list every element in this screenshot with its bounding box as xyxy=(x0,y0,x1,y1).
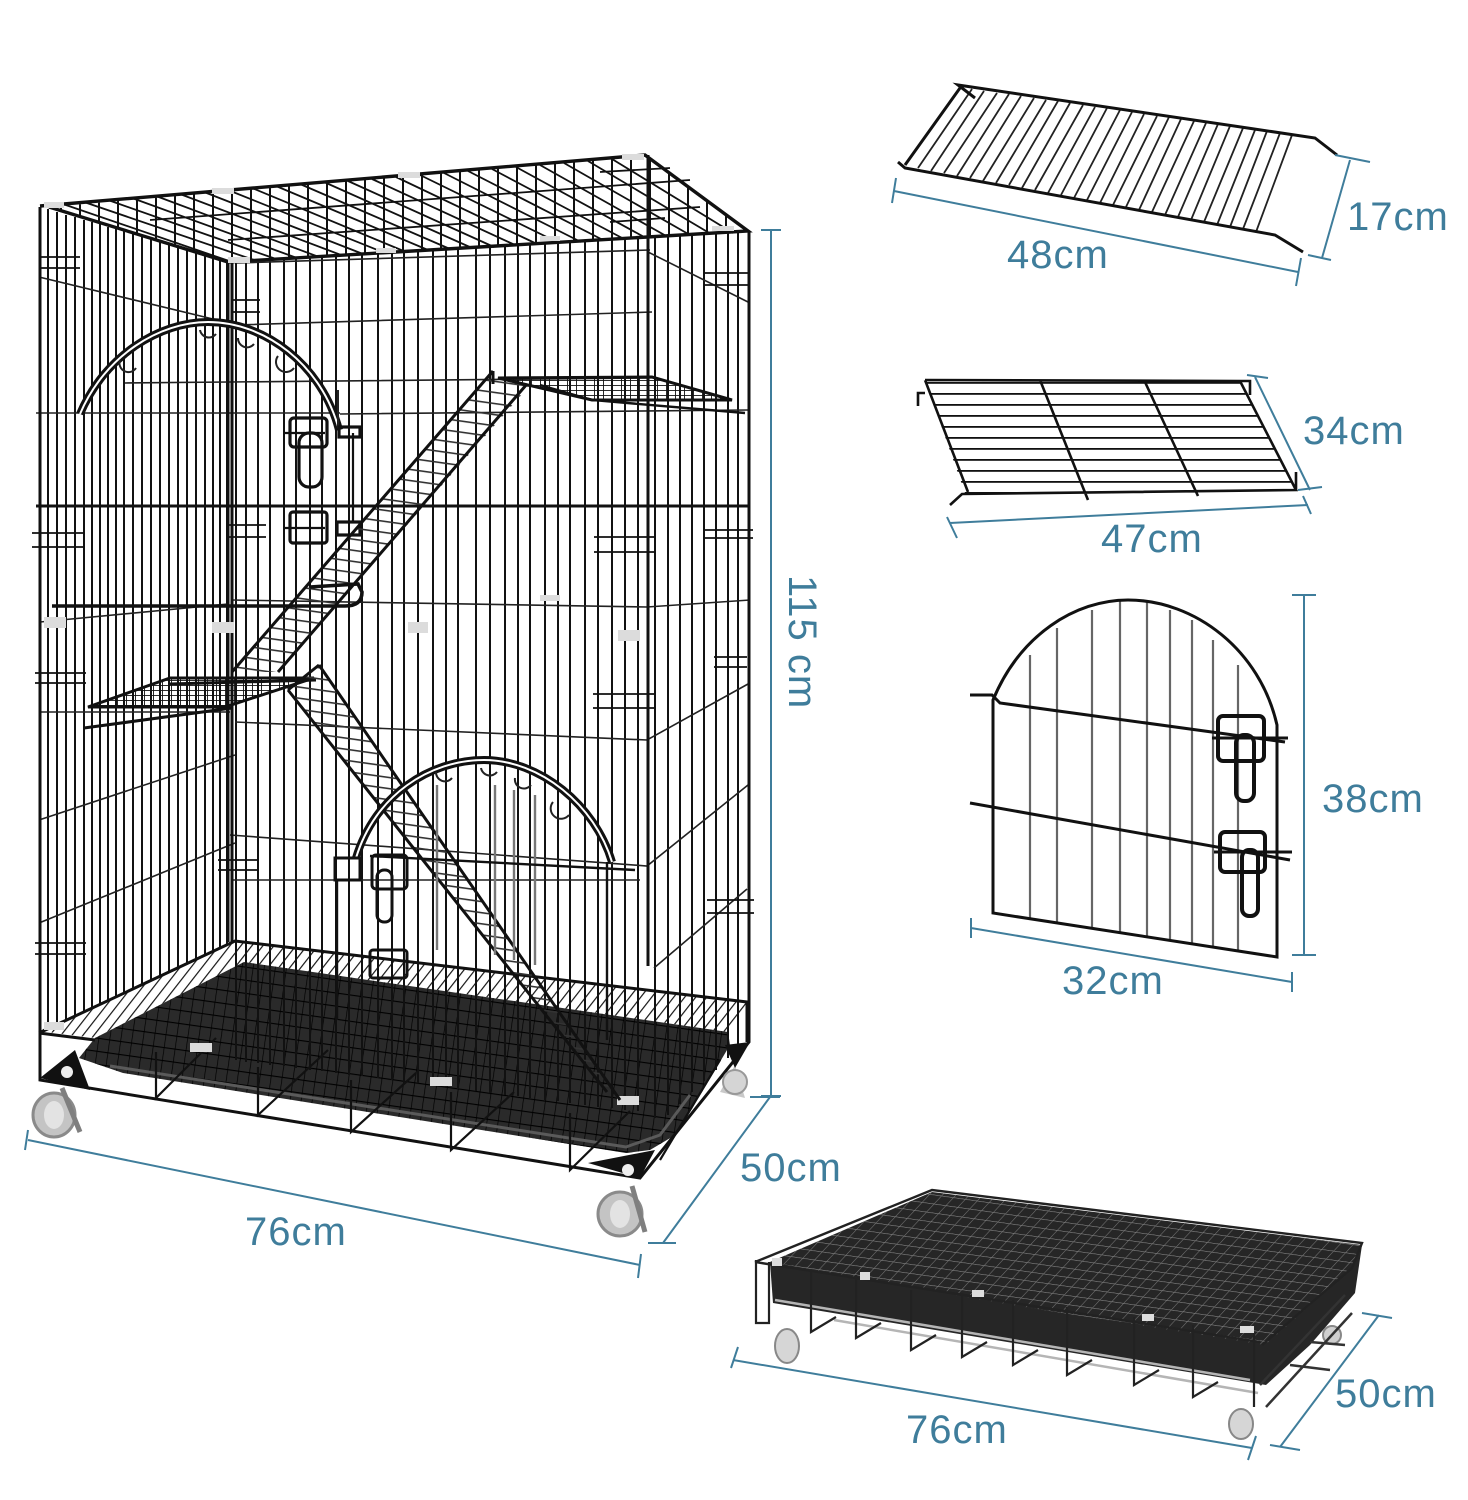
folded outline xyxy=(755,1190,1362,1345)
folded stack wire grid xyxy=(770,1192,1362,1345)
upper ramp xyxy=(232,371,531,672)
upper arch door xyxy=(80,322,339,430)
door grid bars xyxy=(1030,600,1238,952)
wheel front right xyxy=(598,1186,645,1236)
shelf part xyxy=(918,375,1405,561)
lower left shelf xyxy=(84,678,316,728)
caster wheels xyxy=(33,1042,750,1236)
folded right end frame xyxy=(1260,1295,1352,1407)
label: folded 76cm: 76cm xyxy=(906,1408,1008,1452)
label: 34cm xyxy=(1247,375,1405,490)
cage bar at mid height xyxy=(36,504,748,508)
label: 38cm: 38cm xyxy=(1322,777,1424,821)
label: 38cm xyxy=(1292,595,1424,955)
label: 47cm xyxy=(947,496,1311,561)
label: 17cm xyxy=(1308,155,1449,260)
lower ramp xyxy=(288,665,620,1100)
dimension: height 115 cm: 115 cm xyxy=(780,575,824,709)
lower door grey bars xyxy=(437,785,535,965)
folded tray lip xyxy=(775,1300,1258,1393)
cage outer frame xyxy=(39,155,749,1178)
lower door frame and latches xyxy=(335,855,635,1040)
dimension: width 76cm: 76cm xyxy=(245,1210,347,1254)
white clips xyxy=(44,154,734,1105)
ramp part xyxy=(892,85,1449,286)
door part xyxy=(970,595,1424,1003)
folded wheels xyxy=(775,1326,1341,1439)
label: 34cm: 34cm xyxy=(1303,409,1405,453)
cage left side panel bars xyxy=(40,207,227,1031)
cage short wire ticks xyxy=(32,257,754,954)
label: folded 50cm: 50cm xyxy=(1335,1372,1437,1416)
label: 47cm: 47cm xyxy=(1101,517,1203,561)
middle shelf xyxy=(52,584,362,606)
folded stack xyxy=(770,1192,1362,1385)
dimension: depth 50cm xyxy=(648,1097,842,1243)
label: 32cm xyxy=(971,918,1292,1003)
floor hatching behind tray xyxy=(39,942,747,1038)
litter tray xyxy=(79,962,730,1153)
label: folded 50cm xyxy=(1270,1313,1437,1450)
label: 48cm: 48cm xyxy=(1007,233,1109,277)
dimension: depth 50cm: 50cm xyxy=(740,1146,842,1190)
door frame xyxy=(993,600,1277,957)
cage top grid xyxy=(40,155,748,262)
dimension: height 115 cm xyxy=(761,230,824,1096)
label: folded 76cm xyxy=(731,1347,1256,1460)
lower arch door xyxy=(356,760,612,862)
label: 48cm xyxy=(892,178,1301,286)
label: 17cm: 17cm xyxy=(1347,195,1449,239)
folded clips xyxy=(772,1258,1254,1333)
upper right shelf xyxy=(498,377,745,413)
ramp rails xyxy=(898,85,1337,252)
label: 32cm: 32cm xyxy=(1062,959,1164,1003)
corner plates xyxy=(40,1042,750,1178)
main cage xyxy=(32,154,754,1236)
upper door latches xyxy=(283,418,360,543)
cage main wall bars xyxy=(236,233,738,1118)
folded front stubs xyxy=(756,1260,1254,1407)
front floor stubs xyxy=(156,1038,720,1170)
dimension: width 76cm xyxy=(25,1130,641,1278)
cage horizontal bars xyxy=(36,250,750,968)
folded cage xyxy=(731,1190,1437,1460)
door latches xyxy=(1212,716,1292,916)
ramp rungs xyxy=(918,89,1292,232)
wheel front left xyxy=(33,1088,80,1137)
wheel back right xyxy=(720,1065,747,1098)
